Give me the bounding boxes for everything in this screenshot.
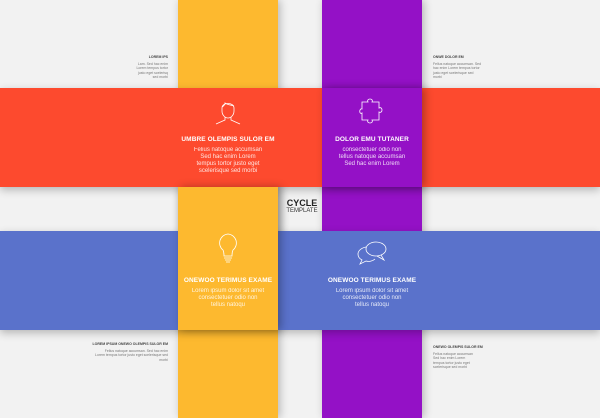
panel: yellow step: Lorem ipsum dolor sit amet [192, 288, 264, 294]
text: top-left note: Lorem tempus tortor [136, 66, 168, 70]
vertical band: yellow [178, 0, 278, 418]
panel: blue step: tellus natoqu [355, 302, 389, 308]
horizontal band: red [0, 88, 600, 187]
text: top-right note: Fellus natoque accumsan. Sed [433, 62, 481, 66]
panel: blue step [328, 242, 416, 308]
text: bottom-right note: Sed hac enim Lorem [433, 356, 465, 360]
panel: red step: Felius natoque accumsan [194, 147, 262, 153]
panel: purple step: Sed hac enim Lorem [344, 161, 400, 167]
text: bottom-left note: morbi [159, 358, 168, 362]
panel: red step [181, 102, 275, 174]
text: top-left note: sed morbi [153, 75, 168, 79]
text: top-left note: Lam. Sed hac enim [138, 62, 168, 66]
text: bottom-right note: ONEWO OLEMPIS SULOR EM [433, 345, 483, 349]
text: top-left note: justo eget scelerisq [138, 71, 168, 75]
text: bottom-left note: LOREM IPSUM ONEWO OLEMPIS SULOR EM [93, 342, 168, 346]
icon: light bulb [219, 234, 237, 262]
panel: yellow step [184, 234, 272, 308]
icon: chat bubbles [358, 242, 386, 265]
text: top-left note: LOREM IPS [149, 55, 168, 59]
panel: yellow step: consectetuer odio non [198, 295, 258, 301]
title: cycle template [286, 198, 318, 214]
text: top-right note: justo eget scelerisque sed [433, 71, 473, 75]
panel: purple step [335, 98, 409, 167]
text: top-right note: morbi [433, 75, 442, 79]
yellow overlay on blue [178, 187, 278, 330]
panel: purple step: DOLOR EMU TUTANER [335, 136, 409, 143]
text: bottom-left note: Lorem tempus tortor justo eget scelerisque sed [95, 353, 168, 357]
panel: purple step: consectetuer odio non [342, 147, 402, 153]
text: top-right note [432, 55, 481, 79]
text: bottom-left note [92, 342, 168, 362]
panel: blue step: consectetuer odio non [342, 295, 402, 301]
title: cycle template: TEMPLATE [286, 208, 318, 214]
panel: blue step: ONEWOO TERIMUS EXAME [328, 277, 416, 284]
text: bottom-right note: scelerisque sed morbi [433, 365, 467, 369]
text: top-right note: ONWE DOLOR EM [433, 55, 464, 59]
text: bottom-left note: Fellus natoque accumsan. Sed hac enim [105, 349, 168, 353]
panel: blue step: Lorem ipsum dolor sit amet [336, 288, 408, 294]
panel: red step: UMBRE OLEMPIS SULOR EM [181, 136, 275, 143]
title: cycle template: CYCLE [287, 198, 317, 208]
text: top-left note [136, 55, 168, 79]
text: top-right note: hac enim Lorem tempus tortor [433, 66, 480, 70]
panel: yellow step: ONEWOO TERIMUS EXAME [184, 277, 272, 284]
panel: yellow step: tellus natoqu [211, 302, 245, 308]
panel: red step: Sed hac enim Lorem [200, 154, 256, 160]
text: bottom-right note: tempus tortor justo eget [433, 361, 470, 365]
text: bottom-right note [433, 345, 483, 369]
icon: person [216, 102, 240, 124]
text: bottom-right note: Fellus natoque accumsan [433, 352, 473, 356]
icon: puzzle [359, 98, 382, 124]
vertical band: purple [322, 0, 422, 418]
purple overlay on red [322, 88, 422, 187]
panel: red step: tempus tortor justo eget [196, 161, 260, 167]
horizontal band: blue [0, 231, 600, 330]
panel: purple step: tellus natoque accumsan [339, 154, 405, 160]
panel: red step: scelerisque sed morbi [199, 168, 257, 174]
